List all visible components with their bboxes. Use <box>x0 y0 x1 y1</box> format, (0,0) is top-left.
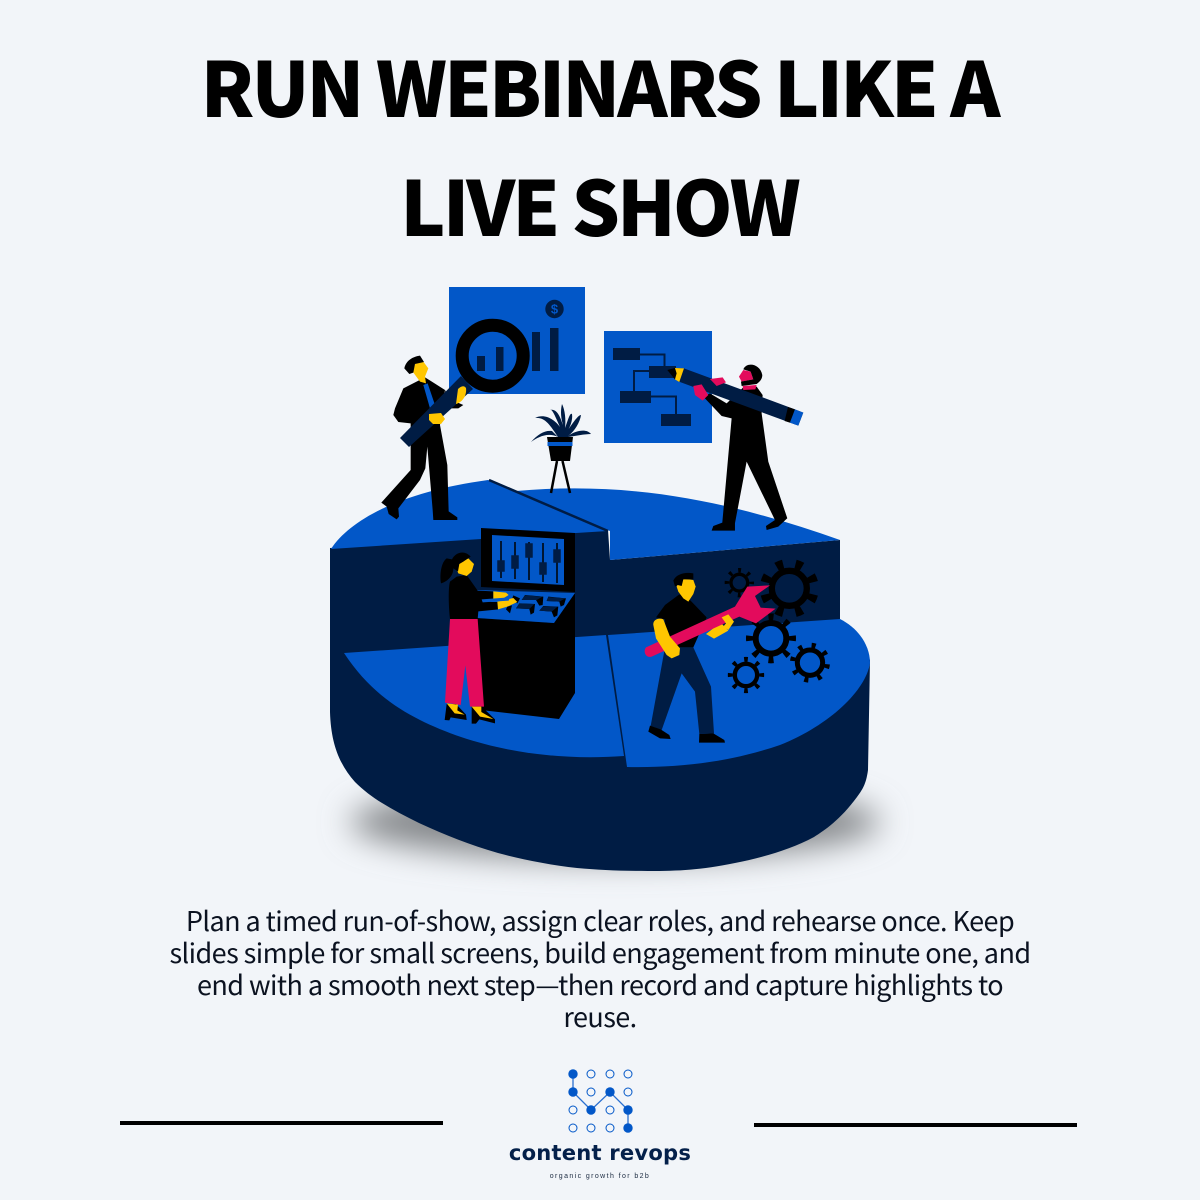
platform shadow <box>350 784 880 860</box>
notch edge line <box>489 480 608 531</box>
console monitor <box>481 528 575 592</box>
body text: slides simple for small screens, build engagement from minute one, and <box>169 932 1031 971</box>
panel: analytics chart board <box>449 287 585 394</box>
back blue slice left <box>331 480 608 549</box>
pencil <box>667 368 803 426</box>
front blue slice right <box>608 619 870 767</box>
platform dark body <box>330 530 870 871</box>
gear right <box>793 645 827 680</box>
wrench <box>645 585 776 657</box>
body text: Plan a timed run-of-show, assign clear roles, and rehearse once. Keep <box>186 900 1014 939</box>
body text: end with a smooth next step—then record and capture highlights to <box>197 964 1003 1003</box>
title: LIVE SHOW <box>400 148 798 258</box>
icon: magnifying glass <box>400 325 523 447</box>
person: man with wrench <box>645 573 776 743</box>
title <box>201 29 1001 258</box>
logo tagline: organic growth for b2b <box>550 1173 650 1180</box>
control console <box>477 528 575 719</box>
person: woman at console <box>440 553 517 724</box>
logo mark <box>568 1069 633 1133</box>
divider left <box>120 1121 443 1125</box>
hands on magnifier <box>429 386 466 424</box>
console keyboard panel <box>477 590 575 623</box>
logo wordmark: content revops <box>509 1140 691 1165</box>
console cabinet <box>477 593 575 719</box>
logo: content revops <box>509 1069 691 1180</box>
gear large <box>764 563 814 613</box>
person: man with magnifier <box>381 356 463 520</box>
panel: flowchart board <box>604 331 712 443</box>
gear middle <box>750 617 792 660</box>
sliders <box>498 541 560 583</box>
gears <box>727 563 827 691</box>
body text: reuse. <box>563 996 637 1035</box>
person: man with pencil <box>667 365 803 531</box>
body text <box>169 900 1031 1035</box>
console keys <box>506 595 566 617</box>
forearm behind wrench <box>706 623 728 639</box>
3D pie platform <box>330 480 870 871</box>
hands over wrench <box>653 614 734 658</box>
title: RUN WEBINARS LIKE A <box>201 29 997 139</box>
divider right <box>754 1123 1077 1127</box>
bar chart <box>477 328 558 371</box>
icon: potted plant <box>531 404 591 493</box>
back blue slice right <box>516 488 840 560</box>
icon: dollar coin: $ <box>551 302 559 316</box>
gear small top <box>727 570 752 595</box>
front blue slice left <box>344 635 624 757</box>
gear left <box>730 659 762 691</box>
